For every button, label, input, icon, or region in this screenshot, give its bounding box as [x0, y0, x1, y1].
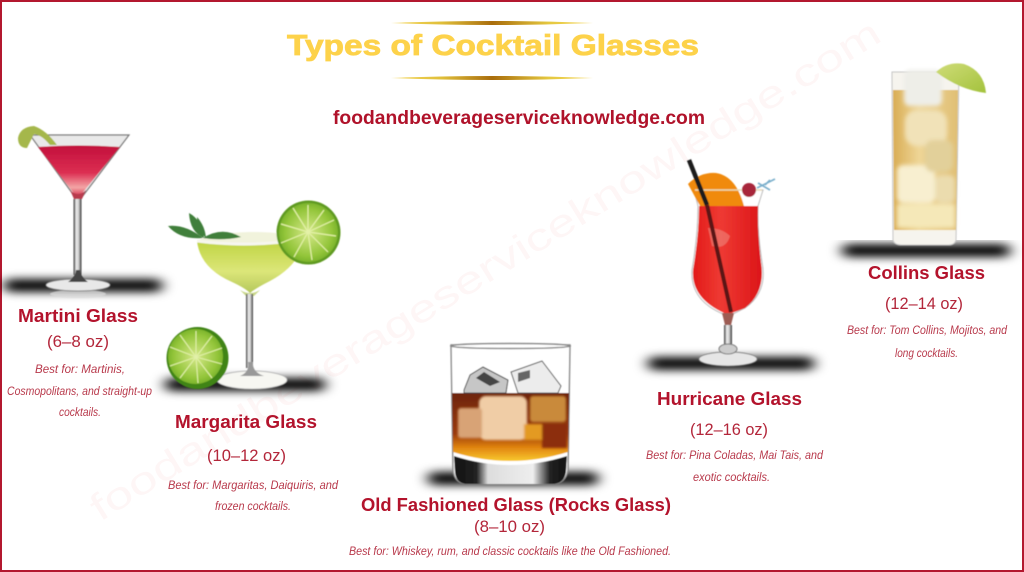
website url: foodandbeverageserviceknowledge.com	[333, 107, 705, 129]
capacity: (10–12 oz)	[207, 447, 286, 465]
heading: Old Fashioned Glass (Rocks Glass)	[361, 494, 671, 515]
title: Types of Cocktail Glasses	[287, 30, 699, 62]
icon: lime wheel	[276, 200, 340, 264]
ice cubes	[458, 361, 567, 448]
shadow	[165, 378, 325, 391]
icon: martini glass	[18, 126, 129, 298]
description	[646, 450, 824, 484]
title rule top	[391, 21, 593, 25]
description: exotic cocktails.	[693, 472, 770, 484]
icon: margarita glass	[166, 200, 340, 389]
panel: margarita glass	[165, 200, 340, 513]
icon: lime half	[166, 327, 228, 389]
heading: Hurricane Glass	[657, 388, 802, 409]
capacity: (8–10 oz)	[474, 518, 545, 536]
description: Best for: Martinis,	[35, 364, 125, 376]
icon: mint garnish	[168, 213, 241, 239]
panel: hurricane glass	[646, 160, 824, 484]
icon: hurricane glass	[688, 160, 775, 366]
shadow	[842, 244, 1010, 257]
shadow	[648, 357, 814, 370]
watermark: foodandbeverageserviceknowledge.com	[83, 12, 888, 530]
description: long cocktails.	[895, 348, 958, 360]
description: frozen cocktails.	[215, 501, 291, 513]
shadow	[4, 279, 162, 292]
title rule bottom	[391, 76, 593, 80]
heading: Margarita Glass	[175, 411, 317, 432]
heading: Martini Glass	[18, 305, 138, 326]
icon: lime wedge	[936, 63, 986, 93]
capacity: (12–14 oz)	[885, 295, 963, 313]
description	[847, 325, 1008, 360]
description: Best for: Whiskey, rum, and classic cocktails like the Old Fashioned.	[349, 546, 671, 558]
icon: orange slice	[688, 173, 744, 206]
description: Best for: Tom Collins, Mojitos, and	[847, 325, 1008, 337]
panel: collins glass	[842, 63, 1010, 360]
description	[168, 480, 339, 513]
description	[7, 364, 153, 419]
panel: old fashioned glass	[349, 344, 671, 558]
ice cubes	[897, 70, 955, 228]
icon: collins glass	[892, 63, 986, 245]
capacity: (12–16 oz)	[690, 421, 768, 439]
description: Best for: Margaritas, Daiquiris, and	[168, 480, 339, 492]
straw	[689, 160, 707, 205]
header	[287, 21, 705, 129]
shadow	[428, 472, 598, 485]
description: cocktails.	[59, 407, 101, 419]
description: Cosmopolitans, and straight-up	[7, 386, 153, 398]
capacity: (6–8 oz)	[47, 333, 109, 351]
description: Best for: Pina Coladas, Mai Tais, and	[646, 450, 824, 462]
icon: rocks glass	[450, 344, 570, 484]
panel: martini glass	[4, 126, 162, 419]
heading: Collins Glass	[868, 262, 985, 283]
